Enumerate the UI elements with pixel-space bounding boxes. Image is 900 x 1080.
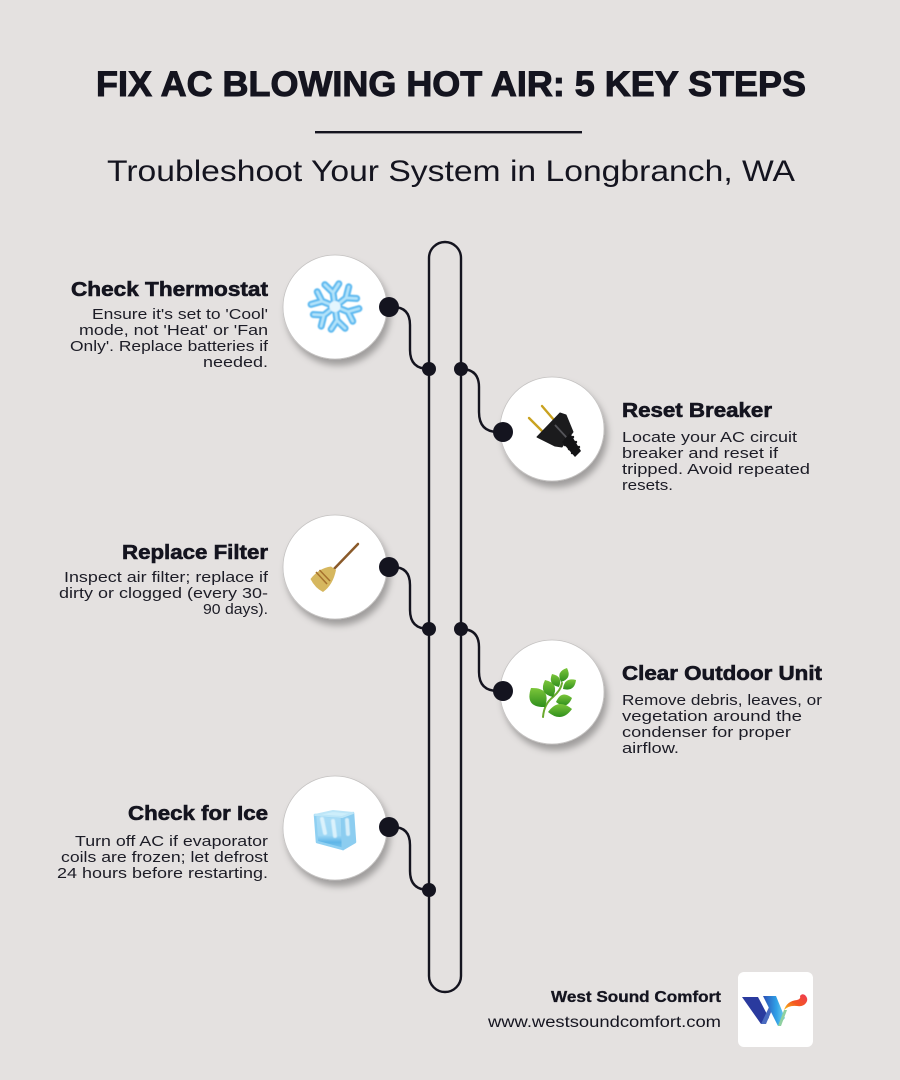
icon circle 1 (283, 255, 387, 359)
body text 5: Turn off AC if evaporator (75, 833, 268, 850)
body text 5: coils are frozen; let defrost (61, 849, 269, 866)
icon: leaf sprig (529, 668, 576, 717)
title: FIX AC BLOWING HOT AIR: 5 KEY STEPS (96, 65, 806, 104)
body text 3 (59, 569, 269, 618)
step 5: check for ice (57, 776, 436, 897)
node 2 (493, 422, 513, 442)
connector 5 (389, 827, 436, 897)
heading 1: Check Thermostat (71, 279, 268, 301)
body text 1 (70, 306, 269, 371)
central timeline track (429, 242, 461, 992)
footer brand (487, 972, 813, 1047)
connector 3 (389, 567, 436, 636)
step 2: reset breaker (454, 362, 810, 494)
body text 2 (622, 429, 810, 494)
node 3 (379, 557, 399, 577)
icon circle 5 (283, 776, 387, 880)
body text 2: Locate your AC circuit (622, 429, 798, 446)
body text 3: 90 days). (203, 601, 268, 618)
body text 3: Inspect air filter; replace if (64, 569, 269, 586)
body text 4: vegetation around the (622, 708, 802, 725)
icon circle 3 (283, 515, 387, 619)
connector 2 (454, 362, 503, 432)
node 4 (493, 681, 513, 701)
node 1 (379, 297, 399, 317)
icon: ice cube (315, 811, 355, 849)
icon: plug (529, 406, 581, 457)
website: www.westsoundcomfort.com (487, 1014, 721, 1031)
body text 4: Remove debris, leaves, or (622, 692, 822, 709)
body text 2: breaker and reset if (622, 445, 779, 462)
body text 5: 24 hours before restarting. (57, 865, 268, 882)
body text 3: dirty or clogged (every 30- (59, 585, 268, 602)
icon circle 4 (500, 640, 604, 744)
node 5 (379, 817, 399, 837)
body text 4: condenser for proper (622, 724, 791, 741)
heading 3: Replace Filter (122, 542, 268, 564)
body text 4 (622, 692, 822, 757)
step 1: check thermostat (70, 255, 436, 376)
icon: broom (310, 544, 358, 592)
heading 4: Clear Outdoor Unit (622, 663, 822, 685)
icon: snowflake (309, 280, 361, 333)
step 4: clear outdoor unit (454, 622, 822, 757)
body text 5 (57, 833, 269, 882)
company name: West Sound Comfort (551, 989, 721, 1006)
body text 4: airflow. (622, 740, 679, 757)
body text 1: Ensure it's set to 'Cool' (92, 306, 268, 323)
body text 2: tripped. Avoid repeated (622, 461, 810, 478)
connector 4 (454, 622, 503, 691)
heading 5: Check for Ice (128, 803, 268, 825)
logo (738, 972, 813, 1047)
icon circle 2 (500, 377, 604, 481)
body text 2: resets. (622, 477, 673, 494)
body text 1: needed. (203, 354, 268, 371)
step 3: replace filter (59, 515, 436, 636)
body text 1: mode, not 'Heat' or 'Fan (79, 322, 268, 339)
body text 1: Only'. Replace batteries if (70, 338, 269, 355)
subtitle: Troubleshoot Your System in Longbranch, WA (107, 155, 795, 188)
connector 1 (389, 307, 436, 376)
heading 2: Reset Breaker (622, 400, 772, 422)
